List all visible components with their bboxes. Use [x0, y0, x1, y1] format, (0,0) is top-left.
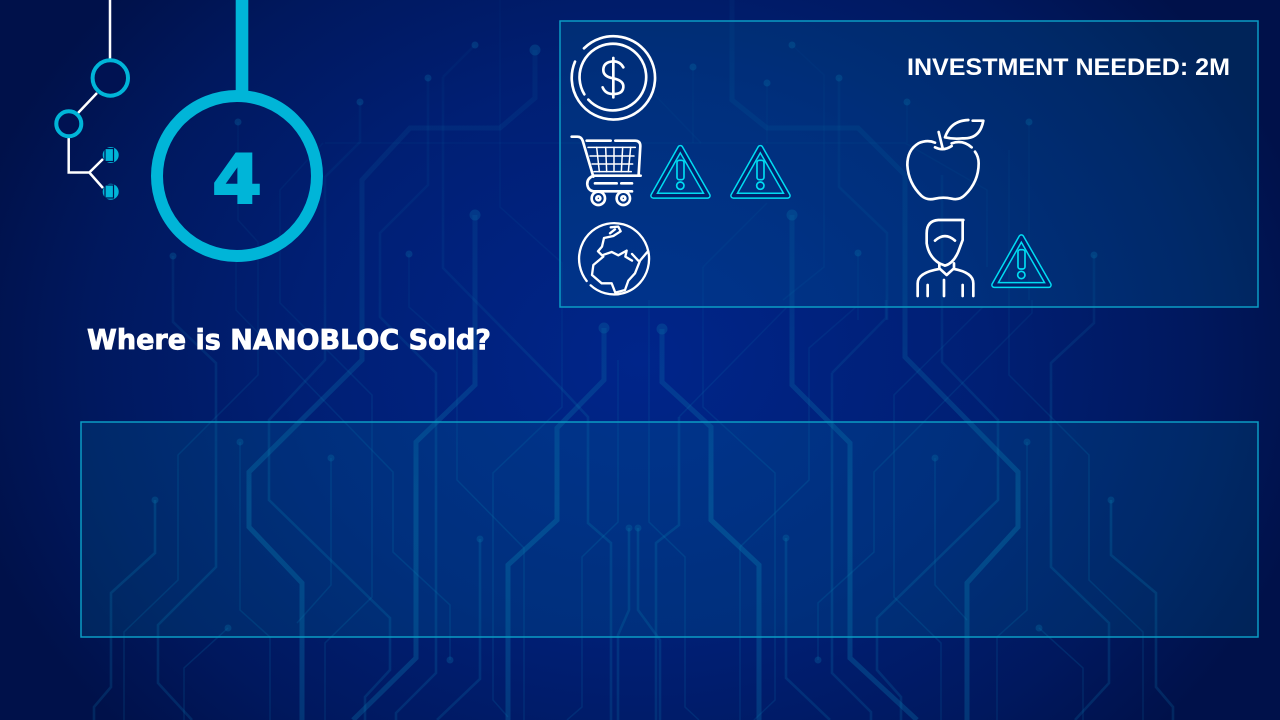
icon: dollar coin — [572, 36, 655, 120]
icon: warning triangle — [994, 237, 1049, 285]
heading: Where is NANOBLOC Sold? — [87, 324, 491, 356]
circuit trace end dots — [152, 42, 1114, 664]
icon: globe — [579, 223, 649, 294]
icon: warning triangle — [653, 148, 708, 196]
panel: investment and icons box — [560, 21, 1258, 307]
investment needed label: INVESTMENT NEEDED: 2M — [907, 54, 1230, 81]
circuit node graphic, small — [56, 0, 128, 200]
step number badge — [157, 0, 317, 256]
icon: shopping cart — [572, 137, 641, 205]
step number: 4 — [212, 141, 262, 220]
icon: person — [918, 220, 973, 296]
icon: apple — [907, 120, 983, 199]
icon: warning triangle — [733, 148, 788, 196]
panel: empty lower content box — [81, 422, 1258, 637]
